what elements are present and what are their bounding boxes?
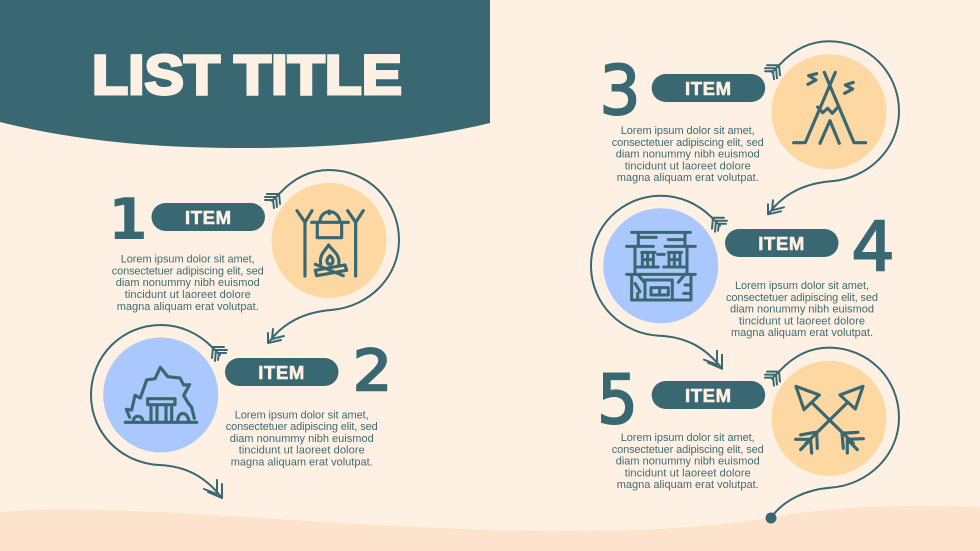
- pill: item 1: ITEM: [185, 207, 231, 228]
- number 4: 4: [851, 208, 895, 287]
- pill: item 4: ITEM: [758, 233, 804, 254]
- circle: item 5: [772, 361, 886, 476]
- connector arrow 2: [91, 325, 227, 498]
- bottom wave: [0, 506, 980, 551]
- text block 1: consectetuer adipiscing elit, sed: [112, 266, 264, 278]
- circle: item 3: [772, 54, 886, 169]
- text block 3: [612, 125, 764, 184]
- pill: item 3: ITEM: [685, 78, 731, 99]
- pill: item 3: [652, 74, 765, 102]
- text block 5: magna aliquam erat volutpat.: [617, 479, 759, 491]
- pill: item 1: [152, 203, 265, 231]
- number 2: 2: [353, 339, 392, 404]
- item 5: [597, 348, 899, 524]
- text block 4: consectetuer adipiscing elit, sed: [726, 292, 878, 304]
- text block 4: diam nonummy nibh euismod: [730, 304, 874, 316]
- text block 2: magna aliquam erat volutpat.: [231, 456, 373, 468]
- circle: item 4: [603, 208, 718, 323]
- circle: item 2: [103, 338, 218, 452]
- text block 5: consectetuer adipiscing elit, sed: [612, 444, 764, 456]
- text block 2: [226, 409, 378, 468]
- pill: item 5: ITEM: [685, 385, 731, 406]
- circle: item 1: [272, 183, 386, 298]
- text block 3: consectetuer adipiscing elit, sed: [612, 137, 764, 149]
- item 1: [108, 170, 399, 343]
- text block 1: Lorem ipsum dolor sit amet,: [121, 254, 255, 266]
- text block 4: Lorem ipsum dolor sit amet,: [735, 280, 869, 292]
- text block 1: diam nonummy nibh euismod: [116, 277, 260, 289]
- icon: saloon building: [627, 232, 695, 300]
- text block 1: magna aliquam erat volutpat.: [117, 301, 259, 313]
- pill: item 5: [652, 381, 765, 409]
- text block 2: diam nonummy nibh euismod: [230, 433, 374, 445]
- text block 2: consectetuer adipiscing elit, sed: [226, 421, 378, 433]
- text block 1: [112, 254, 264, 313]
- icon: tipi: [794, 72, 866, 143]
- text block 5: diam nonummy nibh euismod: [616, 456, 760, 468]
- text block 2: tincidunt ut laoreet dolore: [239, 445, 365, 457]
- icon: stone dolmen: [125, 367, 197, 422]
- text block 2: Lorem ipsum dolor sit amet,: [235, 409, 369, 421]
- number 1: 1: [108, 187, 148, 253]
- text block 3: Lorem ipsum dolor sit amet,: [621, 125, 755, 137]
- item 2: [91, 325, 392, 498]
- text block 3: diam nonummy nibh euismod: [616, 148, 760, 160]
- item 3: [600, 41, 899, 214]
- text block 3: tincidunt ut laoreet dolore: [625, 160, 751, 172]
- connector arrow 4: [591, 196, 727, 369]
- icon: campfire and pot: [297, 211, 363, 276]
- pill: item 2: ITEM: [258, 362, 304, 383]
- text block 4: tincidunt ut laoreet dolore: [739, 315, 865, 327]
- number 3: 3: [600, 52, 640, 131]
- number 5: 5: [597, 361, 638, 440]
- pill: item 2: [225, 358, 338, 386]
- connector arrow 1: [265, 170, 399, 343]
- item 4: [591, 196, 895, 369]
- title: LIST: [92, 43, 220, 106]
- connector arrow 3: [765, 41, 899, 214]
- text block 4: [726, 280, 878, 339]
- title banner: [0, 0, 490, 148]
- connector line 5 with end dot: [765, 348, 899, 524]
- text block 5: tincidunt ut laoreet dolore: [625, 467, 751, 479]
- text block 3: magna aliquam erat volutpat.: [617, 172, 759, 184]
- text block 1: tincidunt ut laoreet dolore: [125, 289, 251, 301]
- text block 5: [612, 432, 764, 491]
- text block 4: magna aliquam erat volutpat.: [731, 327, 873, 339]
- title: TITLE: [234, 43, 402, 106]
- icon: crossed arrows: [796, 386, 863, 453]
- text block 5: Lorem ipsum dolor sit amet,: [621, 432, 755, 444]
- pill: item 4: [725, 229, 838, 257]
